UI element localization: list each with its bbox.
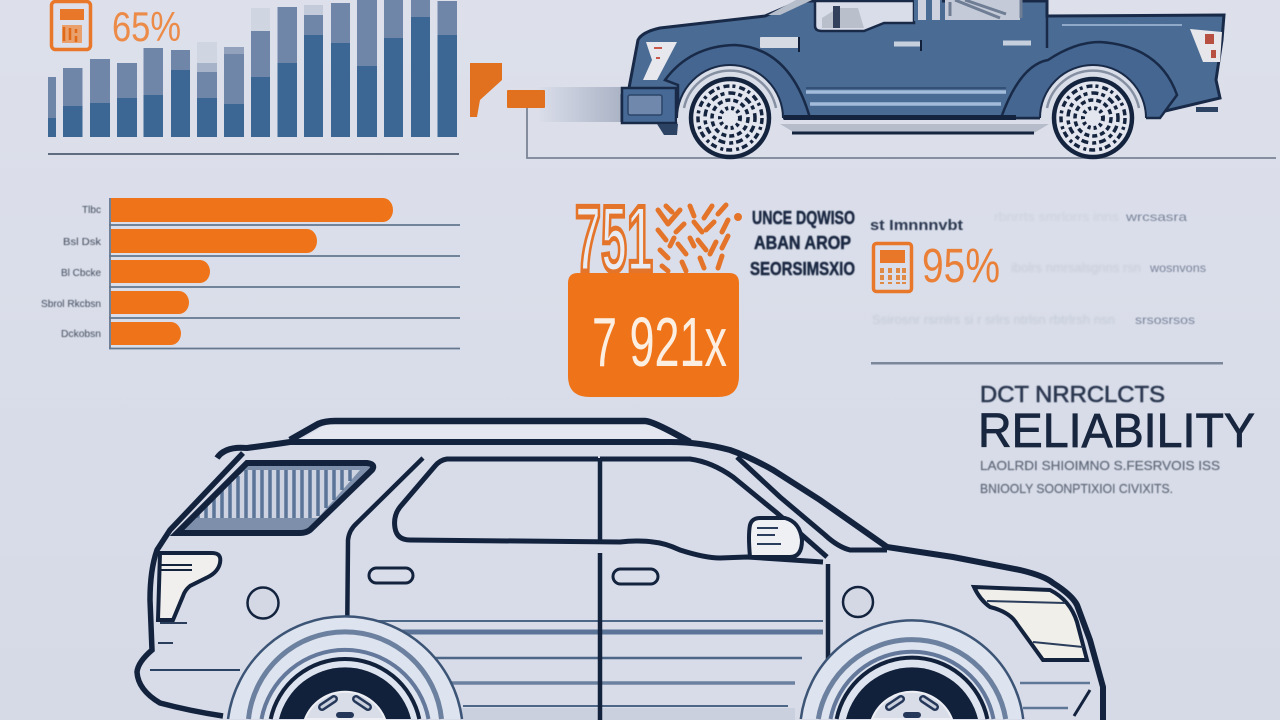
bar labels: Sbrol Rkcbsn xyxy=(41,299,101,310)
rear pillar xyxy=(347,458,423,653)
speed trail behind truck xyxy=(540,87,624,122)
front lamp xyxy=(643,42,677,80)
running board xyxy=(780,124,1049,133)
bar labels: Bl Cbcke xyxy=(61,268,101,279)
round fuel caps xyxy=(248,588,278,618)
faint text rows: Ssirosnr rsrnlrs si r srlrs ntrlsn rbtrlrsh nsn xyxy=(872,312,1115,327)
chart axis and rules xyxy=(109,198,460,349)
door seam xyxy=(600,458,828,720)
grey text rows: wosnvons xyxy=(1149,261,1206,275)
stat: top left percentage: 65% xyxy=(112,3,181,50)
rear step xyxy=(1196,107,1218,112)
tail lamp xyxy=(1190,29,1222,62)
left headlamp xyxy=(158,553,220,643)
faint text rows xyxy=(872,209,1141,327)
dark caption beside number xyxy=(750,208,855,279)
description: BNIOOLY SOONPTIXIOI CIVIXITS. xyxy=(980,481,1173,496)
panel: orange stat box xyxy=(568,273,739,397)
roof light band xyxy=(300,424,682,440)
SUV body fill xyxy=(137,421,1103,720)
bars xyxy=(111,198,393,345)
description xyxy=(980,458,1220,496)
body side stripes xyxy=(150,621,1090,708)
windshield xyxy=(768,0,812,15)
grey text rows: srsosrsos xyxy=(1135,313,1195,327)
stacked bar chart xyxy=(48,0,457,137)
stat number in box: 7 921x xyxy=(592,303,727,381)
illustration: line-art SUV xyxy=(137,421,1103,720)
text: 751 xyxy=(575,186,653,291)
icon: orange flag marker xyxy=(470,63,502,117)
side windows xyxy=(395,459,823,562)
bar labels: Dckobsn xyxy=(61,329,101,340)
truck body xyxy=(622,1,1224,122)
decorative orange chevron pattern xyxy=(658,205,728,271)
faint text rows: rbnrrts smrlorrs inns xyxy=(994,209,1120,224)
grey text rows xyxy=(1125,210,1206,327)
bar labels: Bsl Dsk xyxy=(63,237,102,248)
horizontal bar chart xyxy=(41,198,460,349)
description: LAOLRDI SHIOIMNO S.FESRVOIS ISS xyxy=(980,458,1220,473)
front bumper xyxy=(622,88,676,123)
icon: orange tag xyxy=(507,90,545,108)
dark caption beside number: SEORSIMSXIO xyxy=(750,259,855,279)
icon: orange calculator top left xyxy=(52,2,90,50)
kicker: DCT NRRCLCTS xyxy=(980,381,1165,407)
door handles xyxy=(894,43,1031,44)
bar labels: Tlbc xyxy=(82,205,101,216)
front bumper edge xyxy=(1074,690,1090,716)
dark caption beside number: ABAN AROP xyxy=(754,233,851,253)
right headlamp xyxy=(974,587,1087,660)
stat: 95 percent: 95% xyxy=(922,240,1000,293)
icon: orange calculator xyxy=(874,244,912,292)
front wheel arch xyxy=(665,45,810,118)
bed rail highlight xyxy=(1062,24,1182,26)
illustration: blue pickup truck xyxy=(622,0,1224,157)
title: RELIABILITY xyxy=(978,405,1255,458)
dark caption beside number: UNCE DQWISO xyxy=(752,208,855,228)
rear wheel arch xyxy=(1001,42,1177,118)
small heading right: st Imnnnvbt xyxy=(870,217,963,234)
rear window glass xyxy=(177,463,373,533)
front window and seats xyxy=(815,1,914,31)
wheel wells xyxy=(677,65,1146,122)
orange dot xyxy=(734,213,742,221)
faint text rows: ibolrs nmrsalsgnns rsn xyxy=(1011,260,1141,275)
roof and body outline xyxy=(290,421,690,442)
ground line under truck xyxy=(527,108,1276,158)
bar labels xyxy=(41,205,102,340)
lower body shade xyxy=(460,708,795,720)
door handles xyxy=(369,568,413,583)
grey text rows: wrcsasra xyxy=(1125,210,1187,224)
heading block: reliability xyxy=(978,381,1255,496)
mirror xyxy=(749,518,802,557)
left wheel xyxy=(228,616,462,719)
rear cab window xyxy=(914,0,942,21)
badge xyxy=(760,37,799,48)
a-pillar inner line xyxy=(737,457,887,550)
rear wheel xyxy=(1054,79,1132,157)
body side stripes xyxy=(806,92,1006,104)
front wheel xyxy=(691,79,769,157)
right wheel xyxy=(801,620,1023,719)
